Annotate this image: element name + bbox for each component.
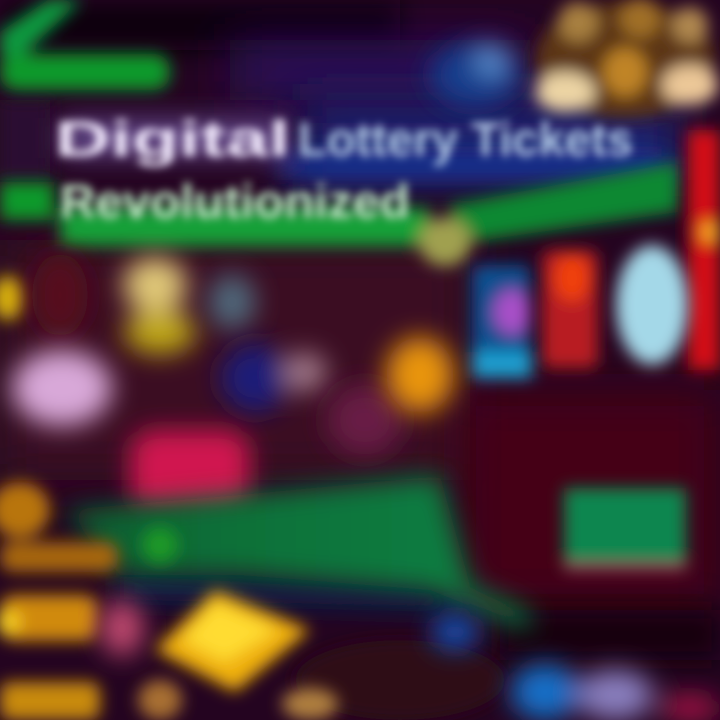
green panel body <box>65 476 530 630</box>
pink strip <box>100 600 144 656</box>
top-right gold coins <box>535 0 718 118</box>
large green panel <box>65 476 530 630</box>
icon: navy figure <box>221 344 327 412</box>
top-left green streaks <box>0 0 170 90</box>
yellow diamond <box>155 590 310 692</box>
heading line two: Revolutionized <box>60 176 410 229</box>
icon: lilac figure <box>12 350 112 426</box>
pale blue circle <box>616 245 688 365</box>
green banner behind heading line two <box>0 162 678 266</box>
bottom gold pieces <box>138 680 338 720</box>
icon: yellow marker at left edge <box>0 276 24 320</box>
heading underlay band <box>60 118 670 177</box>
right red panel <box>688 130 720 370</box>
heading line one <box>55 111 633 167</box>
heading line one: Lottery Tickets <box>298 114 633 167</box>
green dots <box>142 527 178 563</box>
row of character icons <box>0 253 454 456</box>
icon: red accent <box>32 253 88 337</box>
red-orange card <box>542 250 598 368</box>
blue and purple card <box>472 265 532 378</box>
small green card <box>564 488 686 570</box>
navy shadow under panel <box>120 575 470 610</box>
pink badge <box>130 430 250 516</box>
bottom-right colour arc <box>431 614 720 720</box>
icon: plum figure <box>327 384 403 456</box>
icon: orange figure <box>386 337 454 413</box>
top-centre blue glow <box>430 43 520 107</box>
icon: grey figure <box>208 274 256 330</box>
heading line one: Digital <box>55 111 290 167</box>
gold coin stack <box>0 482 118 720</box>
icon: yellow figure <box>123 257 196 354</box>
